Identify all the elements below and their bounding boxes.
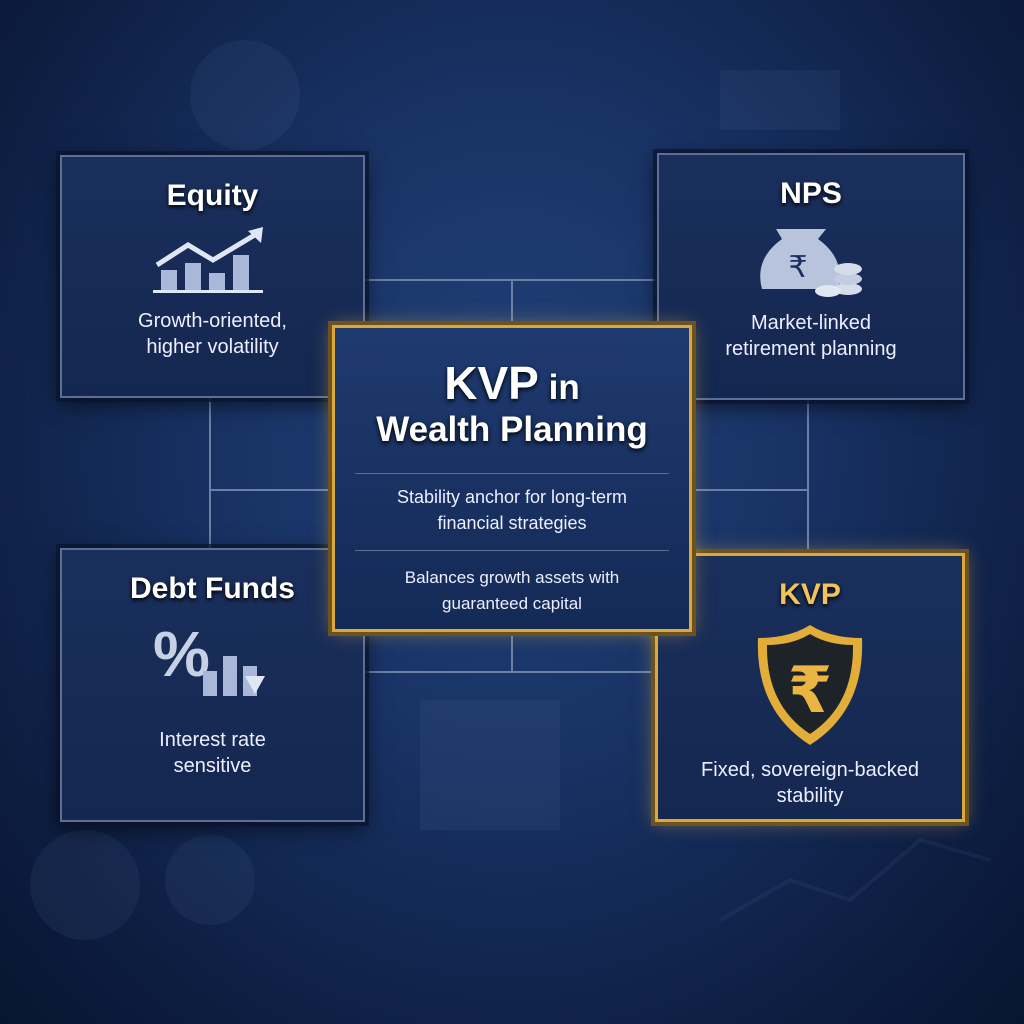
- icon: percent with falling bars: %: [152, 618, 209, 690]
- icon: percent with falling bars: [152, 618, 265, 696]
- text: equity: Growth-oriented,: [138, 310, 287, 332]
- icon: money bag: [760, 229, 862, 297]
- panel: KVP: [655, 553, 965, 822]
- text: NPS: Market-linked: [751, 312, 871, 334]
- text: KVP: Fixed, sovereign-backed: [701, 759, 919, 781]
- heading: center title: [374, 357, 648, 454]
- text: debt funds: Interest rate: [159, 729, 266, 751]
- panel: NPS: [657, 153, 965, 400]
- text: stability anchor: Stability anchor for long-term: [397, 487, 627, 507]
- icon: shield with rupee: [758, 625, 862, 745]
- text: equity: [138, 310, 287, 358]
- icon: shield with rupee: ₹: [788, 654, 832, 728]
- connector lines: [156, 228, 862, 744]
- text: balances growth: guaranteed capital: [442, 594, 582, 613]
- text: KVP: stability: [777, 785, 843, 807]
- text: NPS: retirement planning: [725, 338, 897, 360]
- icon: money bag: ₹: [788, 250, 808, 285]
- heading: KVP: KVP: [779, 578, 841, 611]
- text: balances growth: Balances growth assets with: [405, 568, 619, 587]
- text: KVP: [701, 759, 919, 807]
- panel: debt funds: [60, 548, 365, 822]
- heading: center title: Wealth Planning: [376, 410, 648, 449]
- icon: growth chart: [153, 227, 263, 293]
- heading: debt funds: Debt Funds: [130, 572, 295, 605]
- text: debt funds: [159, 729, 266, 777]
- text: NPS: [725, 312, 897, 360]
- text: debt funds: sensitive: [174, 755, 251, 777]
- text: stability anchor: [355, 473, 669, 536]
- panel: central KVP in wealth planning: [332, 325, 692, 632]
- text: equity: higher volatility: [146, 336, 279, 358]
- heading: NPS: NPS: [780, 177, 842, 210]
- heading: equity: Equity: [167, 179, 258, 212]
- heading: center title: KVP in: [444, 357, 580, 409]
- text: balances growth: [355, 550, 669, 617]
- panel: equity: [60, 155, 365, 398]
- text: stability anchor: financial strategies: [437, 513, 587, 533]
